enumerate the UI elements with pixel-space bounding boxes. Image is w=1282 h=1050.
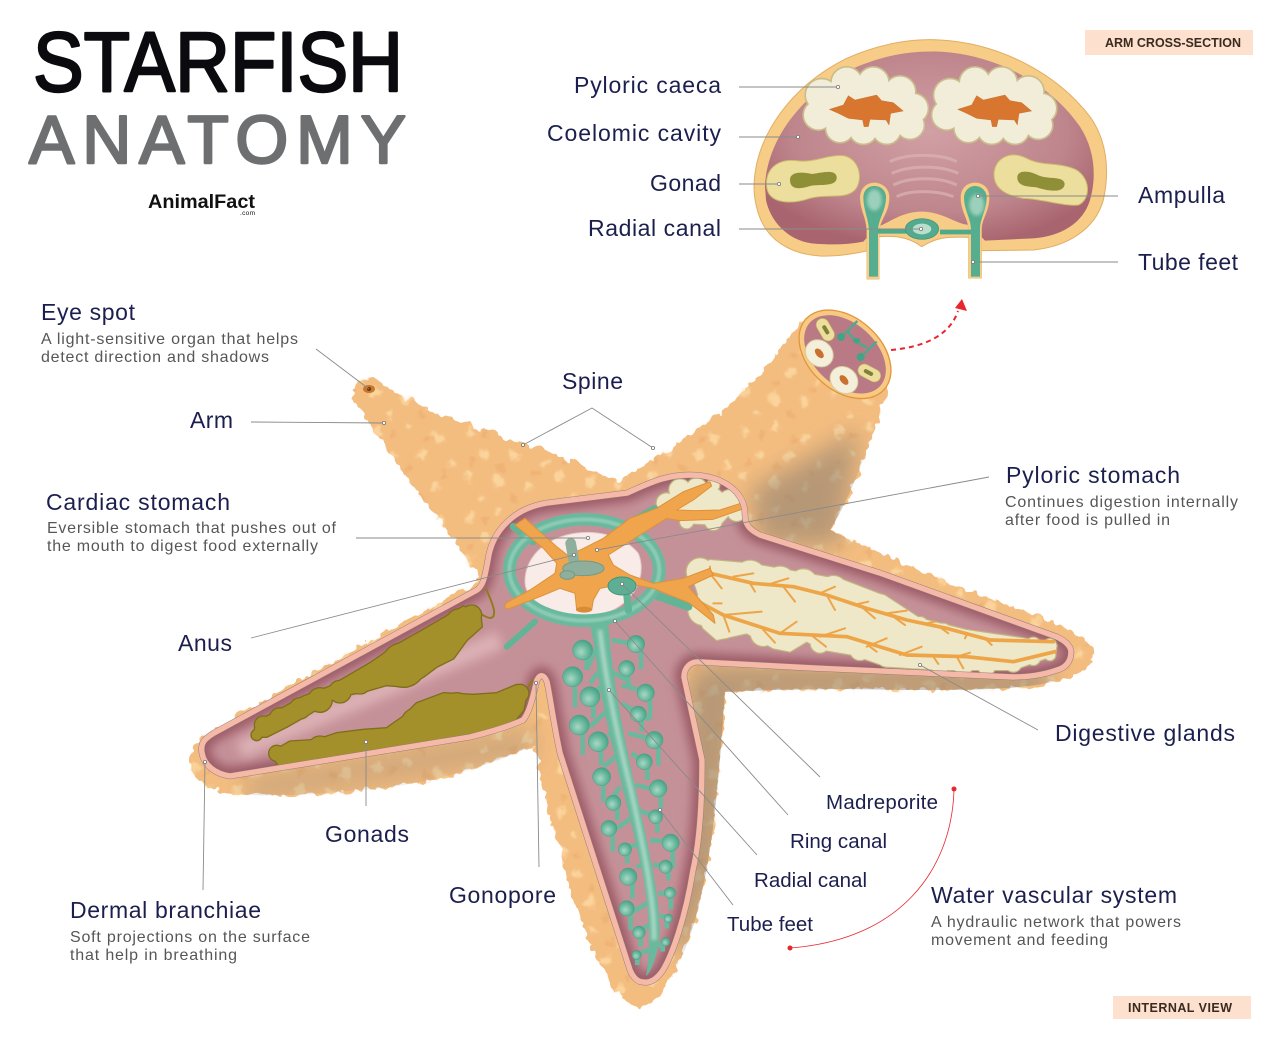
radial canal main tube [590, 625, 660, 976]
digestive glands in right arm [680, 558, 1057, 675]
central disc [505, 482, 743, 647]
stomach and digestive tube trunks [505, 482, 743, 623]
label: Tube feet (water vascular): Tube feet [727, 913, 813, 936]
label: Cardiac stomach: Eversible stomach that pushes out of [47, 520, 337, 537]
white central cavity [525, 532, 641, 616]
label: Water vascular system: A hydraulic network that powers [931, 914, 1181, 931]
tag: internal view: INTERNAL VIEW [1128, 1001, 1232, 1015]
label: Spine: Spine [562, 368, 623, 394]
label: Pyloric stomach: Pyloric stomach [1006, 462, 1180, 488]
upper pyloric caecum [657, 478, 746, 530]
internal cavity [202, 475, 1071, 982]
label: Cardiac stomach [46, 489, 337, 555]
upper gonad [252, 606, 482, 740]
cross-section outer skin [754, 40, 1107, 256]
digestive gland lobes [687, 558, 1057, 675]
cross-section coelom [765, 52, 1094, 244]
label: Eye spot: detect direction and shadows [41, 349, 269, 366]
radial canal and tube feet in lower arm [563, 625, 679, 976]
label: Madreporite: Madreporite [826, 791, 938, 814]
arrow: dotted pointer to cross-section [891, 299, 967, 350]
cross-section muscle folds [890, 155, 958, 197]
cut section ampullae [837, 333, 865, 361]
madreporite [608, 577, 636, 610]
ring canal [509, 519, 659, 621]
label: Gonads: Gonads [325, 821, 409, 847]
label: Digestive glands: Digestive glands [1055, 720, 1235, 746]
gonad ducts [482, 588, 534, 689]
cut section gonad centres [822, 324, 874, 377]
ampullae [563, 635, 679, 960]
gonads in left arm [252, 588, 536, 767]
cut section tube feet [842, 321, 877, 357]
label: Eye spot: Eye spot [41, 299, 136, 325]
label: Dermal branchiae: Dermal branchiae [70, 897, 261, 923]
label: Dermal branchiae: Soft projections on the surface [70, 929, 310, 946]
body leader lines [203, 349, 1038, 905]
ring canal highlight [509, 519, 659, 621]
label: Eye spot: A light-sensitive organ that helps [41, 331, 298, 348]
cut section caeca [800, 334, 863, 399]
cardiac stomach tube [560, 543, 604, 579]
starfish body [190, 312, 1094, 1007]
cut section gonads [814, 316, 883, 384]
title: Anatomy: ANATOMY [29, 102, 406, 178]
eye spot [363, 385, 375, 393]
label: Pyloric stomach: Continues digestion internally [1005, 494, 1238, 511]
label: Arm: Arm [190, 407, 233, 433]
logo: AnimalFact: .com [240, 210, 255, 217]
digestive gland ducts [680, 567, 1055, 668]
label: Ring canal: Ring canal [790, 830, 887, 853]
cross-section pyloric caeca left [802, 66, 929, 145]
label: Pyloric stomach: after food is pulled in [1005, 512, 1170, 529]
label: Dermal branchiae: that help in breathing [70, 947, 237, 964]
label: Anus: Anus [178, 630, 232, 656]
tag: arm cross-section [1085, 30, 1253, 55]
label: Dermal branchiae [70, 897, 310, 964]
cross-section tube feet and radial canal [860, 183, 989, 279]
label: Cardiac stomach: Cardiac stomach [46, 489, 230, 515]
cross-section leader dots [777, 85, 980, 264]
label: Pyloric caeca: Pyloric caeca [574, 72, 721, 98]
green side branches [507, 508, 688, 647]
label: Radial canal (water vascular): Radial canal [754, 869, 867, 892]
body leader dots [203, 421, 922, 812]
lower gonad [269, 685, 528, 767]
logo: AnimalFact: AnimalFact [148, 192, 256, 213]
cross-section leader lines [739, 87, 1118, 262]
title: Starfish: STARFISH [33, 15, 403, 109]
label: Water vascular system [931, 882, 1181, 949]
small arm cut section [782, 292, 908, 416]
label: Cardiac stomach: the mouth to digest food externally [47, 538, 318, 555]
cavity wall outline [202, 475, 1071, 982]
label: Gonad: Gonad [650, 170, 721, 196]
cross-section gonad right [994, 155, 1087, 205]
radial canal highlight [600, 630, 654, 940]
lateral connectors and stems [575, 640, 673, 965]
label: Eye spot [41, 299, 298, 366]
label: Tube feet: Tube feet [1138, 249, 1239, 275]
label: Water vascular system: Water vascular system [931, 882, 1177, 908]
label: Gonopore: Gonopore [449, 882, 556, 908]
label: Radial canal: Radial canal [588, 215, 721, 241]
label: Ampulla: Ampulla [1138, 182, 1225, 208]
panel: arm cross-section diagram [754, 40, 1107, 279]
cross-section gonad left [767, 156, 859, 202]
bracket: water vascular system curve [788, 786, 956, 950]
cross-section pyloric caeca right [931, 66, 1058, 145]
tag: arm cross-section: ARM CROSS-SECTION [1105, 36, 1241, 50]
label: Pyloric stomach [1005, 462, 1238, 529]
label: Water vascular system: movement and feeding [931, 932, 1108, 949]
body shading [240, 430, 1050, 960]
label: Coelomic cavity: Coelomic cavity [547, 120, 722, 146]
tag: internal view [1113, 996, 1251, 1019]
